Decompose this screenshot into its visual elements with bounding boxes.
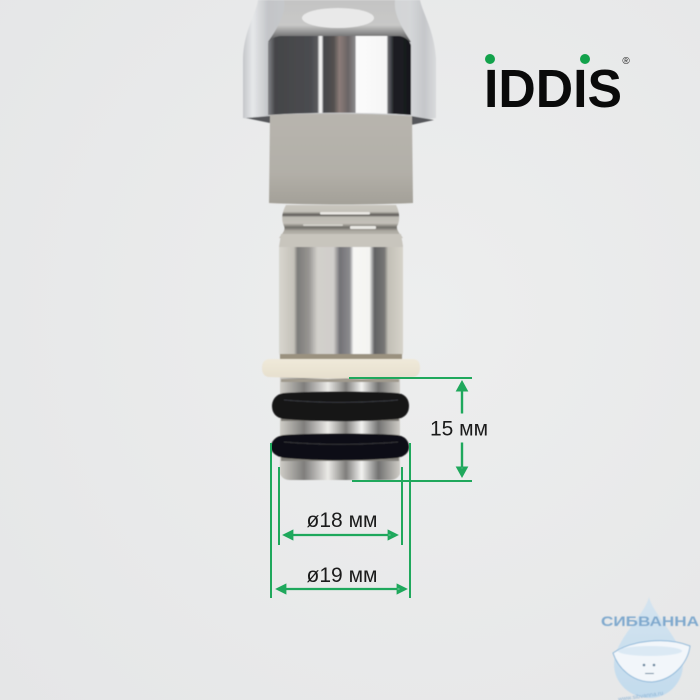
watermark face	[643, 664, 655, 674]
metal neck	[279, 205, 403, 238]
left extension line	[278, 467, 280, 545]
IDDIS logo	[484, 54, 630, 119]
watermark bathtub	[613, 641, 690, 682]
dimension: diameter 18 mm	[278, 467, 403, 545]
lower arrow	[456, 443, 468, 477]
stem middle section	[280, 416, 400, 440]
metal neck highlights	[303, 212, 376, 229]
double arrow	[283, 530, 398, 540]
metal body bottom shadow	[280, 354, 402, 359]
bottom extension line	[352, 480, 472, 482]
diameter 19 label: ø19 мм	[307, 564, 377, 587]
watermark drop	[614, 597, 683, 698]
chrome band	[268, 36, 411, 115]
upper O-ring	[272, 392, 409, 421]
left extension line	[270, 443, 272, 598]
metal body top fade	[279, 234, 403, 247]
logo green dot left	[485, 54, 495, 64]
right extension line	[401, 467, 403, 545]
diameter 18 label: ø18 мм	[307, 509, 377, 532]
product: chrome fitting	[243, 0, 436, 480]
chrome neck	[268, 0, 411, 42]
grey sleeve	[269, 114, 413, 204]
chrome nut outer shell	[243, 0, 436, 122]
right extension line	[409, 443, 411, 598]
lower metal stem	[280, 376, 400, 394]
lower O-ring	[271, 434, 409, 460]
dimension: length 15 mm	[349, 377, 488, 482]
watermark: Sibvanna	[601, 597, 699, 700]
length label: 15 мм	[430, 418, 488, 440]
watermark bathtub inner	[618, 646, 682, 656]
stem bottom section	[280, 452, 400, 480]
double arrow	[276, 584, 407, 594]
upper O-ring sheen	[284, 400, 398, 402]
watermark brand name: СИБВАННА	[601, 614, 699, 629]
top extension line	[349, 377, 472, 379]
upper arrow	[456, 381, 468, 413]
stem middle groove	[281, 418, 399, 421]
white washer	[262, 359, 420, 378]
metal body	[279, 234, 403, 358]
logo green dot right	[580, 54, 590, 64]
logo wordmark: IDDIS	[484, 59, 622, 119]
chrome neck highlight	[302, 8, 374, 28]
chrome nut shadow under rim	[246, 116, 434, 125]
stem bottom shadow	[281, 456, 399, 461]
stem groove	[281, 379, 399, 382]
logo registered mark: ®	[622, 56, 630, 67]
dimension: diameter 19 mm	[270, 443, 411, 598]
lower O-ring sheen	[284, 442, 398, 444]
